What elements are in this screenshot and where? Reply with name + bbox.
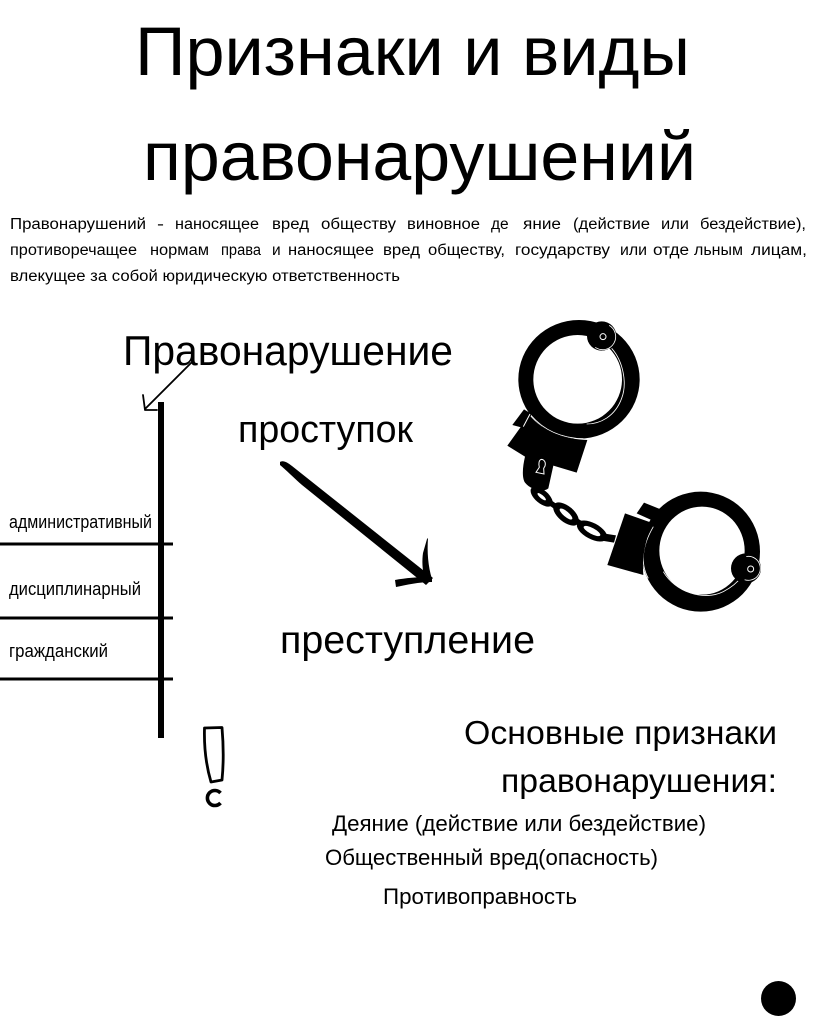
- definition text block: противоречащее: [10, 242, 137, 259]
- diagram: vertical bar with three categories: дисциплинарный: [9, 579, 141, 599]
- upper cuff seam: [531, 348, 624, 439]
- definition text block: вред: [272, 216, 309, 233]
- upper lock block: [512, 409, 532, 428]
- definition text block: наносящее: [288, 242, 374, 259]
- thick arrow: [280, 461, 433, 587]
- definition text block: льным: [694, 242, 743, 259]
- definition text block: обществу,: [428, 242, 505, 259]
- heading: основные признаки: [464, 714, 777, 799]
- definition text block: бездействие),: [700, 216, 806, 233]
- definition text block: -: [157, 216, 164, 233]
- icon: exclamation mark: [204, 728, 223, 806]
- title: [135, 13, 696, 195]
- list of main features: Общественный вред(опасность): [325, 845, 658, 870]
- definition text block: влекущее за собой юридическую ответственность: [10, 268, 400, 285]
- lower lock block: [607, 513, 653, 575]
- definition text block: и: [272, 242, 281, 259]
- diagram: vertical bar with three categories: [0, 402, 173, 738]
- diagram: vertical bar with three categories: административный: [9, 512, 152, 532]
- definition text block: наносящее: [175, 216, 259, 233]
- lower cuff seam: [643, 527, 742, 596]
- definition text block: де: [491, 216, 509, 233]
- lower rivet: [731, 553, 761, 583]
- label: преступление: преступление: [280, 619, 535, 662]
- upper cuff ring: [518, 320, 640, 439]
- list of main features: Противоправность: [383, 884, 577, 909]
- definition text block: обществу: [321, 216, 396, 233]
- definition text block: яние: [523, 216, 561, 233]
- thin arrow to the list: [143, 362, 192, 410]
- definition text block: (действие: [573, 216, 650, 233]
- definition text block: вред: [383, 242, 420, 259]
- title: Признаки и виды: [135, 13, 690, 90]
- definition text block: [10, 216, 807, 285]
- upper rivet: [587, 321, 616, 351]
- title: правонарушений: [143, 118, 696, 195]
- heading: основные признаки: Основные признаки: [464, 714, 777, 751]
- definition text block: лицам,: [751, 242, 807, 259]
- definition text block: государству: [515, 242, 610, 259]
- heading: Правонарушение: Правонарушение: [123, 327, 453, 374]
- keyhole: [536, 459, 545, 474]
- definition text block: права: [221, 242, 261, 259]
- definition text block: виновное: [407, 216, 480, 233]
- list of main features: [325, 811, 706, 909]
- definition text block: нормам: [150, 242, 209, 259]
- label: проступок: проступок: [238, 409, 413, 451]
- heading: основные признаки: правонарушения:: [501, 762, 777, 799]
- chain: [527, 483, 610, 546]
- icon: handcuffs: [507, 319, 762, 612]
- definition text block: отде: [653, 242, 689, 259]
- definition text block: или: [661, 216, 689, 233]
- page marker dot: [761, 981, 796, 1016]
- lower cuff ring: [641, 492, 760, 612]
- definition text block: Правонарушений: [10, 216, 146, 233]
- list of main features: Деяние (действие или бездействие): [332, 811, 706, 836]
- definition text block: или: [620, 242, 647, 259]
- diagram: vertical bar with three categories: гражданский: [9, 641, 108, 661]
